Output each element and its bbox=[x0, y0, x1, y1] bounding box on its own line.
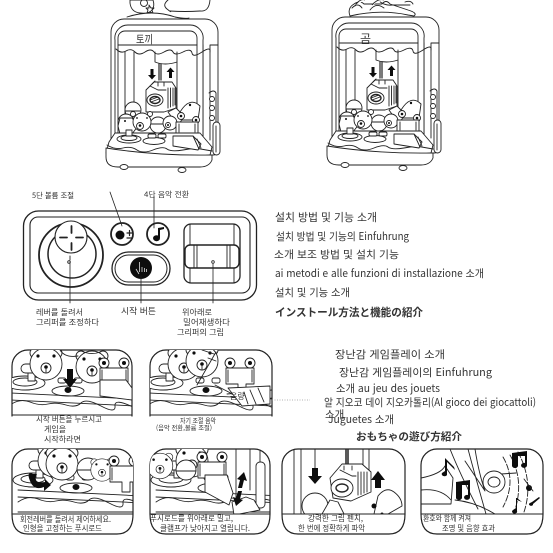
panel: turn the lever bbox=[12, 445, 143, 534]
callout: volume: 음량 bbox=[230, 391, 245, 402]
caption bbox=[423, 513, 496, 534]
text block: gameplay intro translations: 장난감 게임플레이의 Einfuhrung bbox=[339, 365, 492, 380]
control: volume button bbox=[111, 223, 133, 245]
illustration: bear claw machine bbox=[327, 0, 441, 170]
icon: rotate arrow bbox=[29, 473, 51, 491]
caption bbox=[150, 513, 250, 534]
control: start button bbox=[112, 252, 170, 285]
control labels bbox=[32, 189, 231, 338]
machine label: 토끼 bbox=[136, 31, 153, 47]
caption: 자기 조절 음악 bbox=[180, 416, 216, 426]
text block: gameplay intro translations bbox=[324, 347, 536, 444]
caption: 조명 및 음향 효과 bbox=[442, 523, 496, 534]
control labels: 4단 음악 전환 bbox=[144, 189, 189, 200]
caption: 클램프가 낮아지고 열립니다. bbox=[160, 523, 250, 534]
text block: gameplay intro translations: おもちゃの遊び方紹介 bbox=[356, 429, 463, 444]
control labels: 그리퍼를 조정하다 bbox=[36, 317, 100, 328]
panel: strong grip claw bbox=[282, 449, 405, 534]
caption: (음악 전환,볼륨 조절) bbox=[156, 422, 212, 432]
control labels: 그리퍼의 그립 bbox=[177, 327, 224, 338]
text block: gameplay intro translations: 장난감 게임플레이 소개 bbox=[335, 347, 445, 362]
caption: 푸시로드를 위아래로 밀고, bbox=[150, 513, 233, 524]
dotted leader bbox=[272, 399, 310, 401]
text block: gameplay intro translations: 소개 bbox=[325, 407, 344, 422]
text block: gameplay intro translations: Juguetes 소개 bbox=[328, 412, 394, 427]
control: rotary lever bbox=[39, 221, 103, 287]
caption: 게임을 bbox=[44, 424, 66, 435]
machine top ornament bbox=[127, 0, 210, 18]
caption: 강력한 그립 펜치, bbox=[308, 513, 363, 524]
caption bbox=[156, 416, 216, 432]
text block: installation intro translations: ai metodi e alle funzioni di installazione 소개 bbox=[275, 266, 484, 281]
text block: gameplay intro translations: 알 지오코 데이 지오카톨리(Al gioco dei giocattoli) bbox=[324, 395, 536, 410]
control labels: 레버를 돌려서 bbox=[36, 307, 83, 318]
icon: down arrow bbox=[308, 468, 322, 484]
caption: 환호와 함께 켜져 bbox=[423, 513, 471, 524]
text block: installation intro translations: 소개 보조 방법 및 설치 기능 bbox=[274, 247, 399, 262]
text block: installation intro translations bbox=[274, 209, 484, 320]
bear top ornament bbox=[349, 0, 415, 16]
panel: press start button bbox=[5, 348, 135, 445]
panel: push rod bbox=[149, 448, 271, 535]
icon: press arrow bbox=[63, 369, 77, 388]
text block: installation intro translations: 설치 방법 및 기능의 Einfuhrung bbox=[276, 229, 409, 244]
control labels: 5단 볼륨 조절 bbox=[32, 190, 74, 201]
panel: control board bbox=[24, 211, 256, 300]
text block: gameplay intro translations: 소개 au jeu des jouets bbox=[336, 381, 440, 396]
caption: 시작 버튼을 누르시고 bbox=[36, 414, 102, 425]
illustration: rabbit claw machine bbox=[106, 0, 220, 172]
control labels: 위아래로 bbox=[182, 307, 212, 318]
leader lines bbox=[70, 192, 214, 303]
icon: up arrow bbox=[371, 471, 385, 488]
machine label: 곰 bbox=[360, 30, 371, 47]
caption: 회전레버를 돌려서 제어하세요. bbox=[20, 514, 111, 525]
control labels: 시작 버튼 bbox=[121, 305, 156, 317]
text block: installation intro translations: インストール方法と機能の紹介 bbox=[275, 304, 423, 320]
caption: 한 번에 정확하게 파악 bbox=[298, 523, 366, 534]
caption: 시작하라면 bbox=[44, 434, 81, 445]
control labels: 밀어재생하다 bbox=[183, 317, 231, 328]
caption bbox=[36, 414, 102, 445]
caption bbox=[20, 514, 111, 534]
icon: music notes bbox=[442, 451, 540, 514]
text block: installation intro translations: 설치 및 기능 소개 bbox=[275, 285, 350, 300]
text block: installation intro translations: 설치 방법 및 기능 소개 bbox=[275, 209, 377, 225]
caption bbox=[298, 513, 366, 534]
icon: up and down arrows bbox=[233, 472, 247, 506]
control: push rod slider bbox=[184, 224, 240, 283]
panel: adjust music and volume bbox=[143, 345, 310, 432]
panel: light and sound bbox=[421, 449, 543, 534]
caption: 인형을 고정하는 푸시로드 bbox=[23, 523, 102, 534]
control: music button bbox=[147, 223, 169, 245]
